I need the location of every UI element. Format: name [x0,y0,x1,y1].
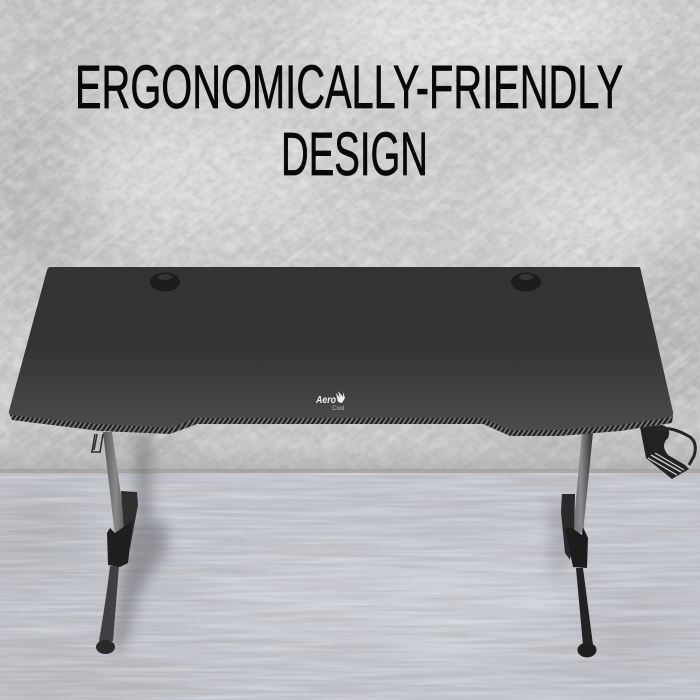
left rear bracket [121,491,138,548]
desk surface [9,267,673,430]
AeroCool logo: Aero [315,395,336,406]
right clamp [565,527,588,568]
left cable grommet [150,272,180,292]
upper left leg [103,432,126,536]
left foot [96,640,115,654]
right desk leg [561,432,596,658]
headset hook [91,434,103,452]
AeroCool logo: Cool [332,406,344,412]
carbon fibre edge [9,410,673,436]
title [75,53,623,188]
right cable grommet [511,272,541,292]
upper right leg [573,432,593,533]
left desk leg [91,432,138,654]
wall tonal blotches [0,0,700,470]
right foot [578,642,596,658]
left clamp [107,520,133,567]
band of shade under desk [0,432,700,471]
lower right leg [576,568,593,645]
wooden floor background [0,469,700,700]
concrete wall background [0,0,700,472]
plate stripes [648,453,684,475]
leg shadows on wall and floor [10,426,670,650]
desk top [9,267,673,436]
AeroCool logo [315,391,345,412]
right rear bracket [561,494,575,560]
cup holder [640,425,695,479]
title: DESIGN [281,120,428,188]
cup ring [656,429,695,465]
cup holder body [640,425,689,479]
lower left leg [99,566,119,641]
